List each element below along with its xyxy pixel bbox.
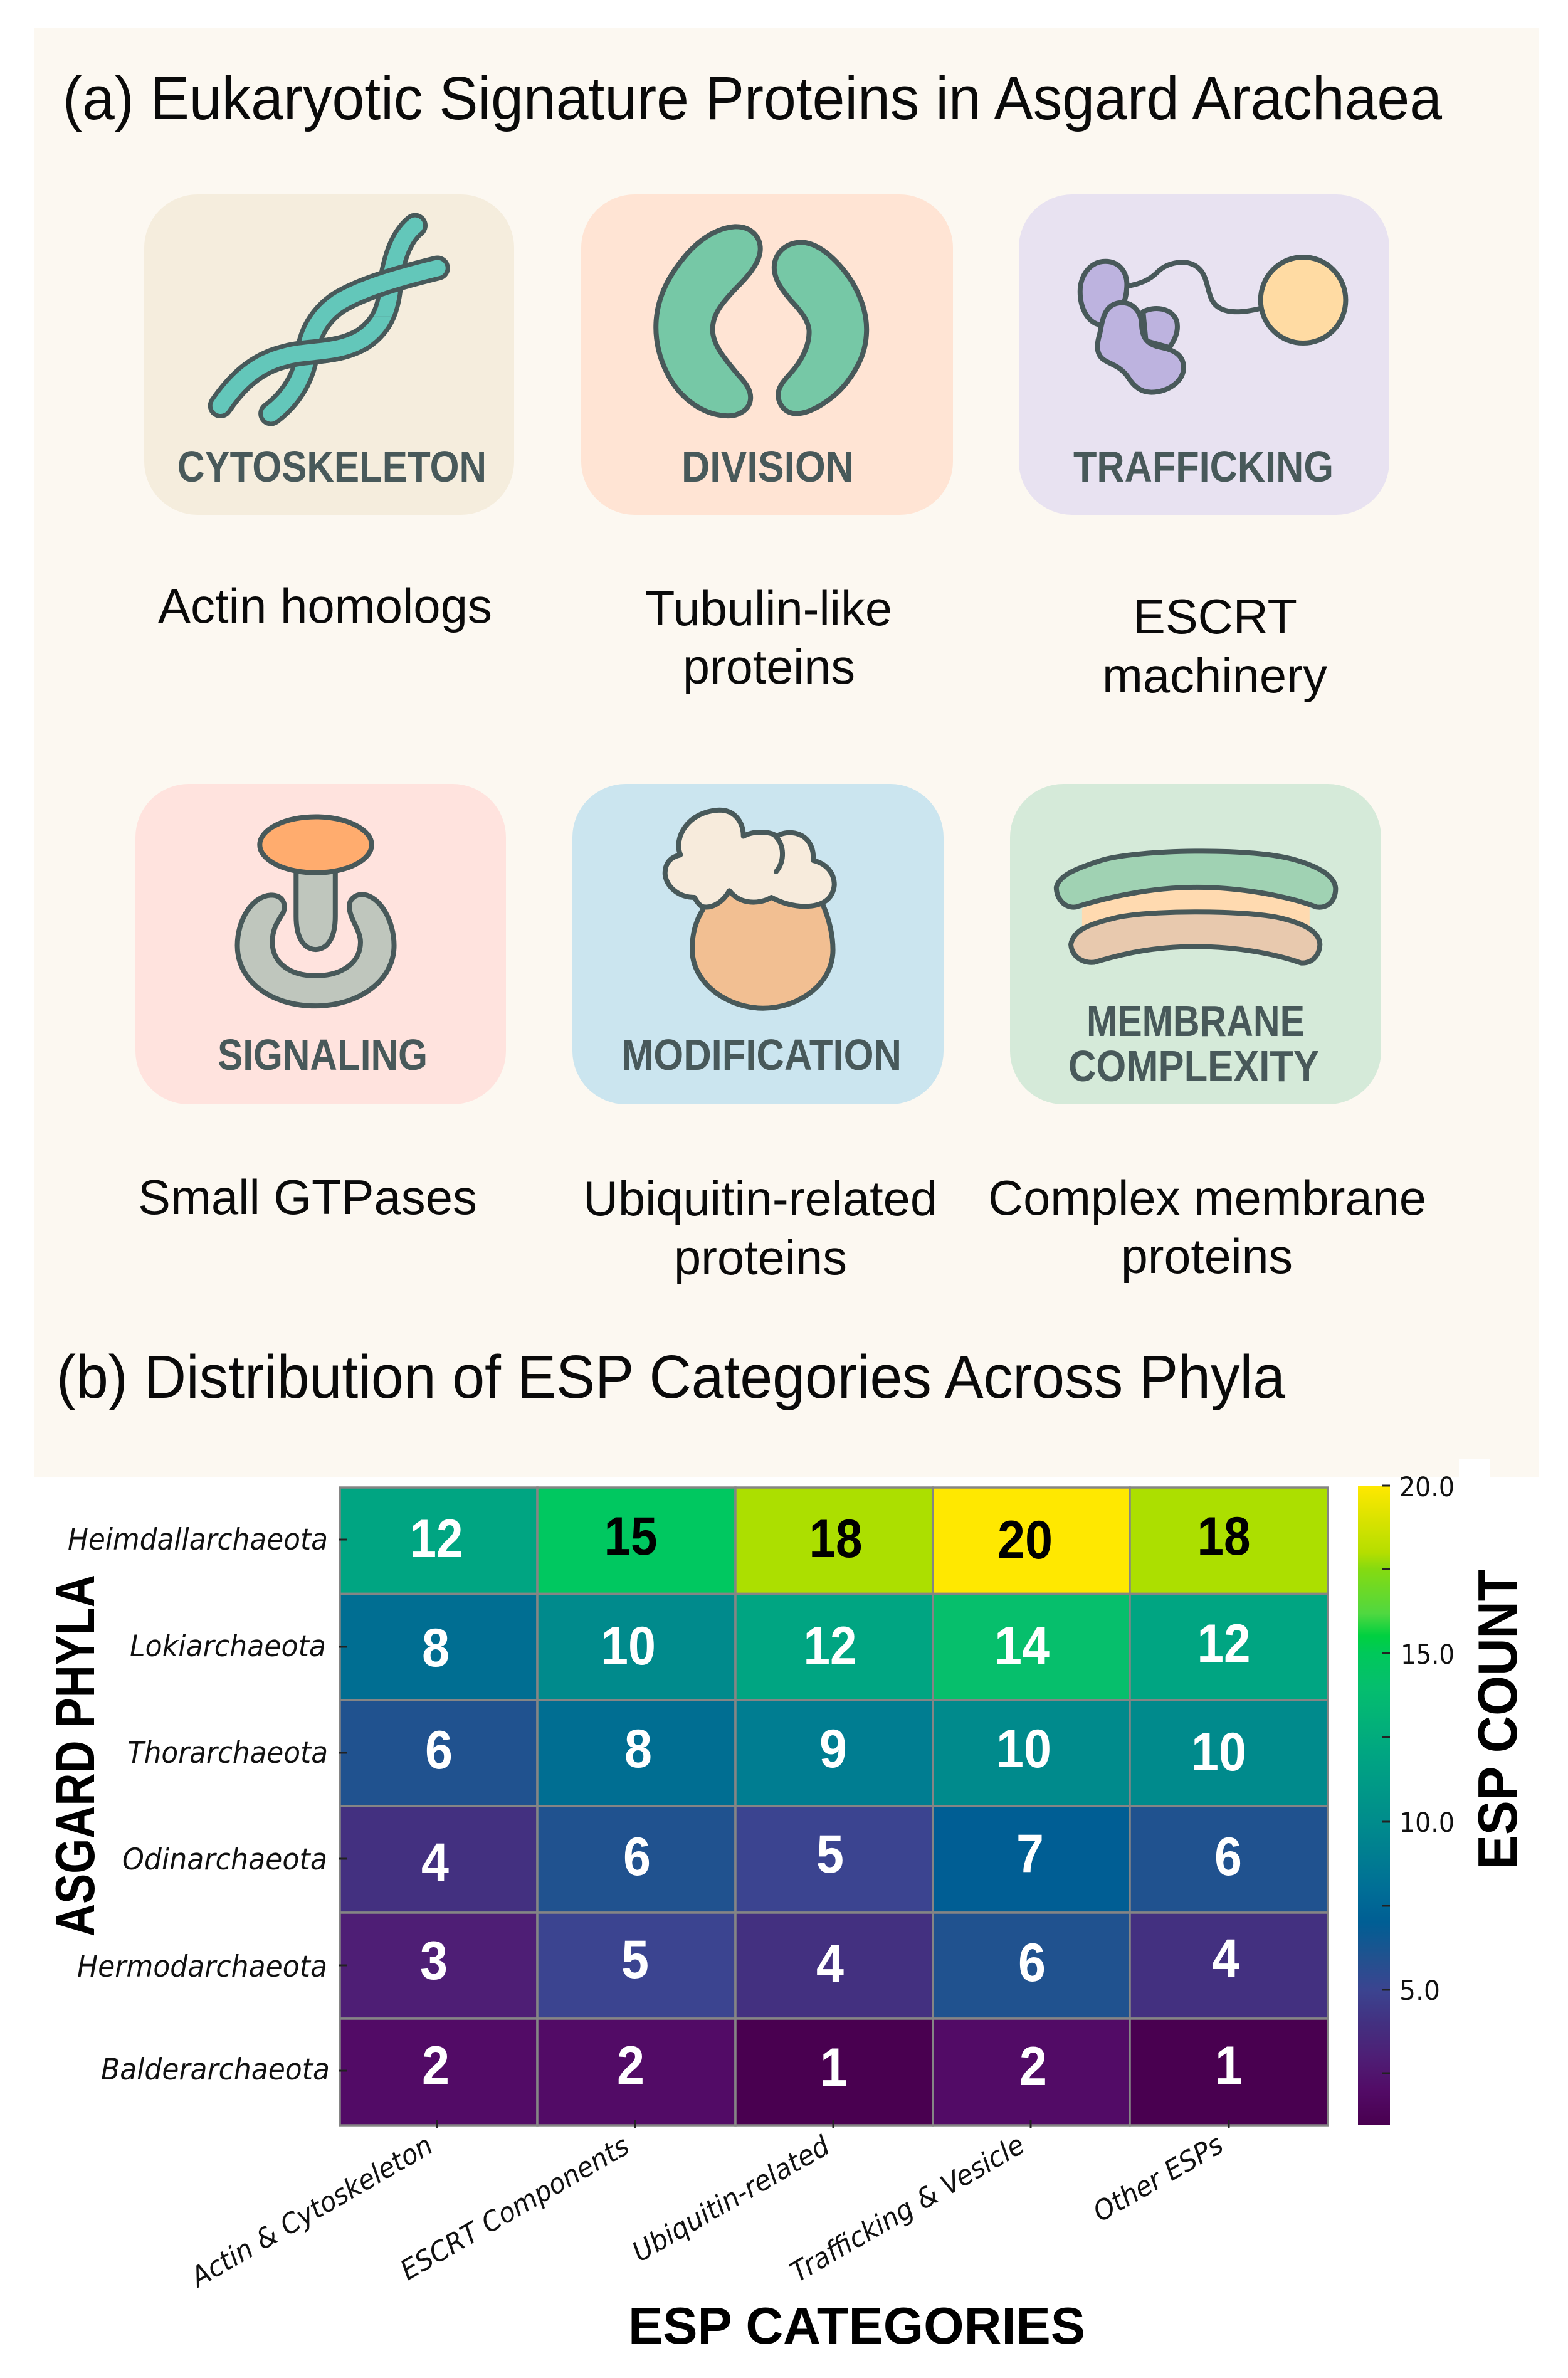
card label: trafficking: TRAFFICKING (1073, 442, 1334, 491)
heatmap values: 1 (1215, 2036, 1243, 2096)
panel: cytoskeleton card (144, 194, 514, 515)
legend: colour bar: 20.0 (1399, 1472, 1455, 1503)
y-axis phylum labels: Thorarchaeota (127, 1736, 328, 1770)
y-axis phylum labels: Odinarchaeota (122, 1842, 327, 1877)
x-axis category labels: Other ESPs (1088, 2128, 1229, 2229)
text: ubiquitin-related proteins: Ubiquitin-related (583, 1171, 937, 1226)
text: complex membrane proteins: Complex membrane (988, 1170, 1426, 1225)
heatmap values: 10 (601, 1616, 656, 1676)
text: tubulin-like proteins: Tubulin-like (645, 581, 892, 636)
icon: ubiquitin cloud on substrate (665, 810, 834, 1008)
y-axis phylum labels: Heimdallarchaeota (68, 1523, 328, 1557)
heatmap values: 15 (604, 1506, 657, 1567)
icon: small GTPase (238, 816, 394, 1006)
heatmap values: 4 (1212, 1928, 1239, 1989)
card label: cytoskeleton: CYTOSKELETON (177, 442, 487, 491)
card label: signaling: SIGNALING (218, 1030, 428, 1079)
x-axis category labels: ESCRT Components (395, 2130, 634, 2287)
x-axis title: ESP CATEGORIES (628, 2296, 1085, 2355)
card label: membrane complexity (1068, 996, 1319, 1091)
y-axis phylum labels: Hermodarchaeota (77, 1950, 327, 1984)
heatmap values (410, 1506, 1250, 2098)
card label: modification: MODIFICATION (621, 1030, 902, 1079)
heatmap values: 4 (816, 1934, 844, 1994)
x-axis category labels: Ubiquitin-related (627, 2130, 836, 2269)
title: panel b heading: (b) Distribution of ESP Categories Across Phyla (56, 1343, 1285, 1411)
icon: ESCRT blobs and vesicle (1080, 257, 1345, 393)
panel: trafficking card (1019, 194, 1389, 515)
heatmap values: 6 (1214, 1827, 1242, 1887)
heatmap values: 6 (425, 1720, 453, 1780)
colour bar title: ESP COUNT (1466, 1570, 1529, 1869)
card label: membrane complexity: MEMBRANE (1087, 996, 1305, 1045)
y-axis title: ASGARD PHYLA (44, 1575, 106, 1937)
text: ubiquitin-related proteins (583, 1171, 937, 1285)
heatmap values: 14 (994, 1616, 1050, 1676)
x-axis category labels (184, 2128, 1229, 2295)
text: ESCRT machinery (1102, 589, 1327, 703)
text: tubulin-like proteins (645, 581, 892, 694)
icon: actin filament twist (221, 226, 438, 413)
heatmap values: 2 (1019, 2036, 1047, 2096)
heatmap values: 2 (422, 2036, 450, 2096)
text: tubulin-like proteins: proteins (683, 639, 855, 694)
y-axis phylum labels: Balderarchaeota (101, 2053, 330, 2087)
icon: membrane layers (1056, 851, 1335, 963)
heatmap values: 6 (623, 1827, 651, 1887)
text: ESCRT machinery: machinery (1102, 648, 1327, 703)
heatmap values: 10 (996, 1719, 1051, 1779)
heatmap values: 6 (1018, 1933, 1046, 1993)
heatmap values: 18 (809, 1509, 863, 1569)
heatmap values: 18 (1197, 1506, 1250, 1567)
heatmap values: 5 (816, 1824, 844, 1884)
panel: membrane complexity card (1010, 784, 1381, 1104)
legend: colour bar: 10.0 (1399, 1807, 1455, 1839)
heatmap values: 12 (804, 1616, 856, 1676)
heatmap values: 3 (420, 1931, 448, 1991)
heatmap values: 8 (422, 1618, 450, 1678)
legend: colour bar (1358, 1472, 1455, 2125)
title: panel a heading: (a) Eukaryotic Signature Proteins in Asgard Arachaea (63, 64, 1442, 132)
legend: colour bar: 15.0 (1401, 1639, 1455, 1671)
text: small GTPases: Small GTPases (138, 1170, 477, 1225)
heatmap values: 10 (1191, 1722, 1246, 1782)
y-axis phylum labels: Lokiarchaeota (130, 1629, 326, 1664)
x-axis category labels: Actin & Cytoskeleton (184, 2129, 438, 2295)
heatmap values: 2 (617, 2036, 645, 2096)
legend: colour bar: 5.0 (1399, 1975, 1440, 2007)
text: ESCRT machinery: ESCRT (1133, 589, 1297, 644)
y-axis phylum labels (68, 1523, 330, 2087)
panel: division card (581, 194, 953, 515)
text: actin homologs: Actin homologs (158, 578, 492, 633)
panel: cream background of section a and heading b (34, 28, 1539, 1477)
heatmap values: 4 (421, 1832, 449, 1893)
text: complex membrane proteins (988, 1170, 1426, 1284)
panel: modification card (572, 784, 944, 1104)
icon: tubulin-like halves (656, 226, 866, 416)
heatmap values: 7 (1016, 1824, 1044, 1884)
x-axis category labels: Trafficking & Vesicle (785, 2128, 1030, 2289)
heatmap values: 12 (1197, 1614, 1250, 1674)
card label: division: DIVISION (681, 442, 854, 491)
heatmap values: 8 (624, 1719, 652, 1779)
heatmap values: 5 (621, 1930, 649, 1990)
text: ubiquitin-related proteins: proteins (674, 1230, 847, 1285)
heatmap values: 20 (997, 1510, 1053, 1570)
chart: heatmap of ESP counts (339, 1488, 1328, 2128)
heatmap values: 12 (410, 1509, 463, 1569)
panel: signaling card (135, 784, 506, 1104)
heatmap values: 1 (820, 2037, 848, 2098)
card label: membrane complexity: COMPLEXITY (1068, 1042, 1319, 1091)
heatmap values: 9 (819, 1719, 847, 1779)
text: complex membrane proteins: proteins (1121, 1229, 1293, 1284)
